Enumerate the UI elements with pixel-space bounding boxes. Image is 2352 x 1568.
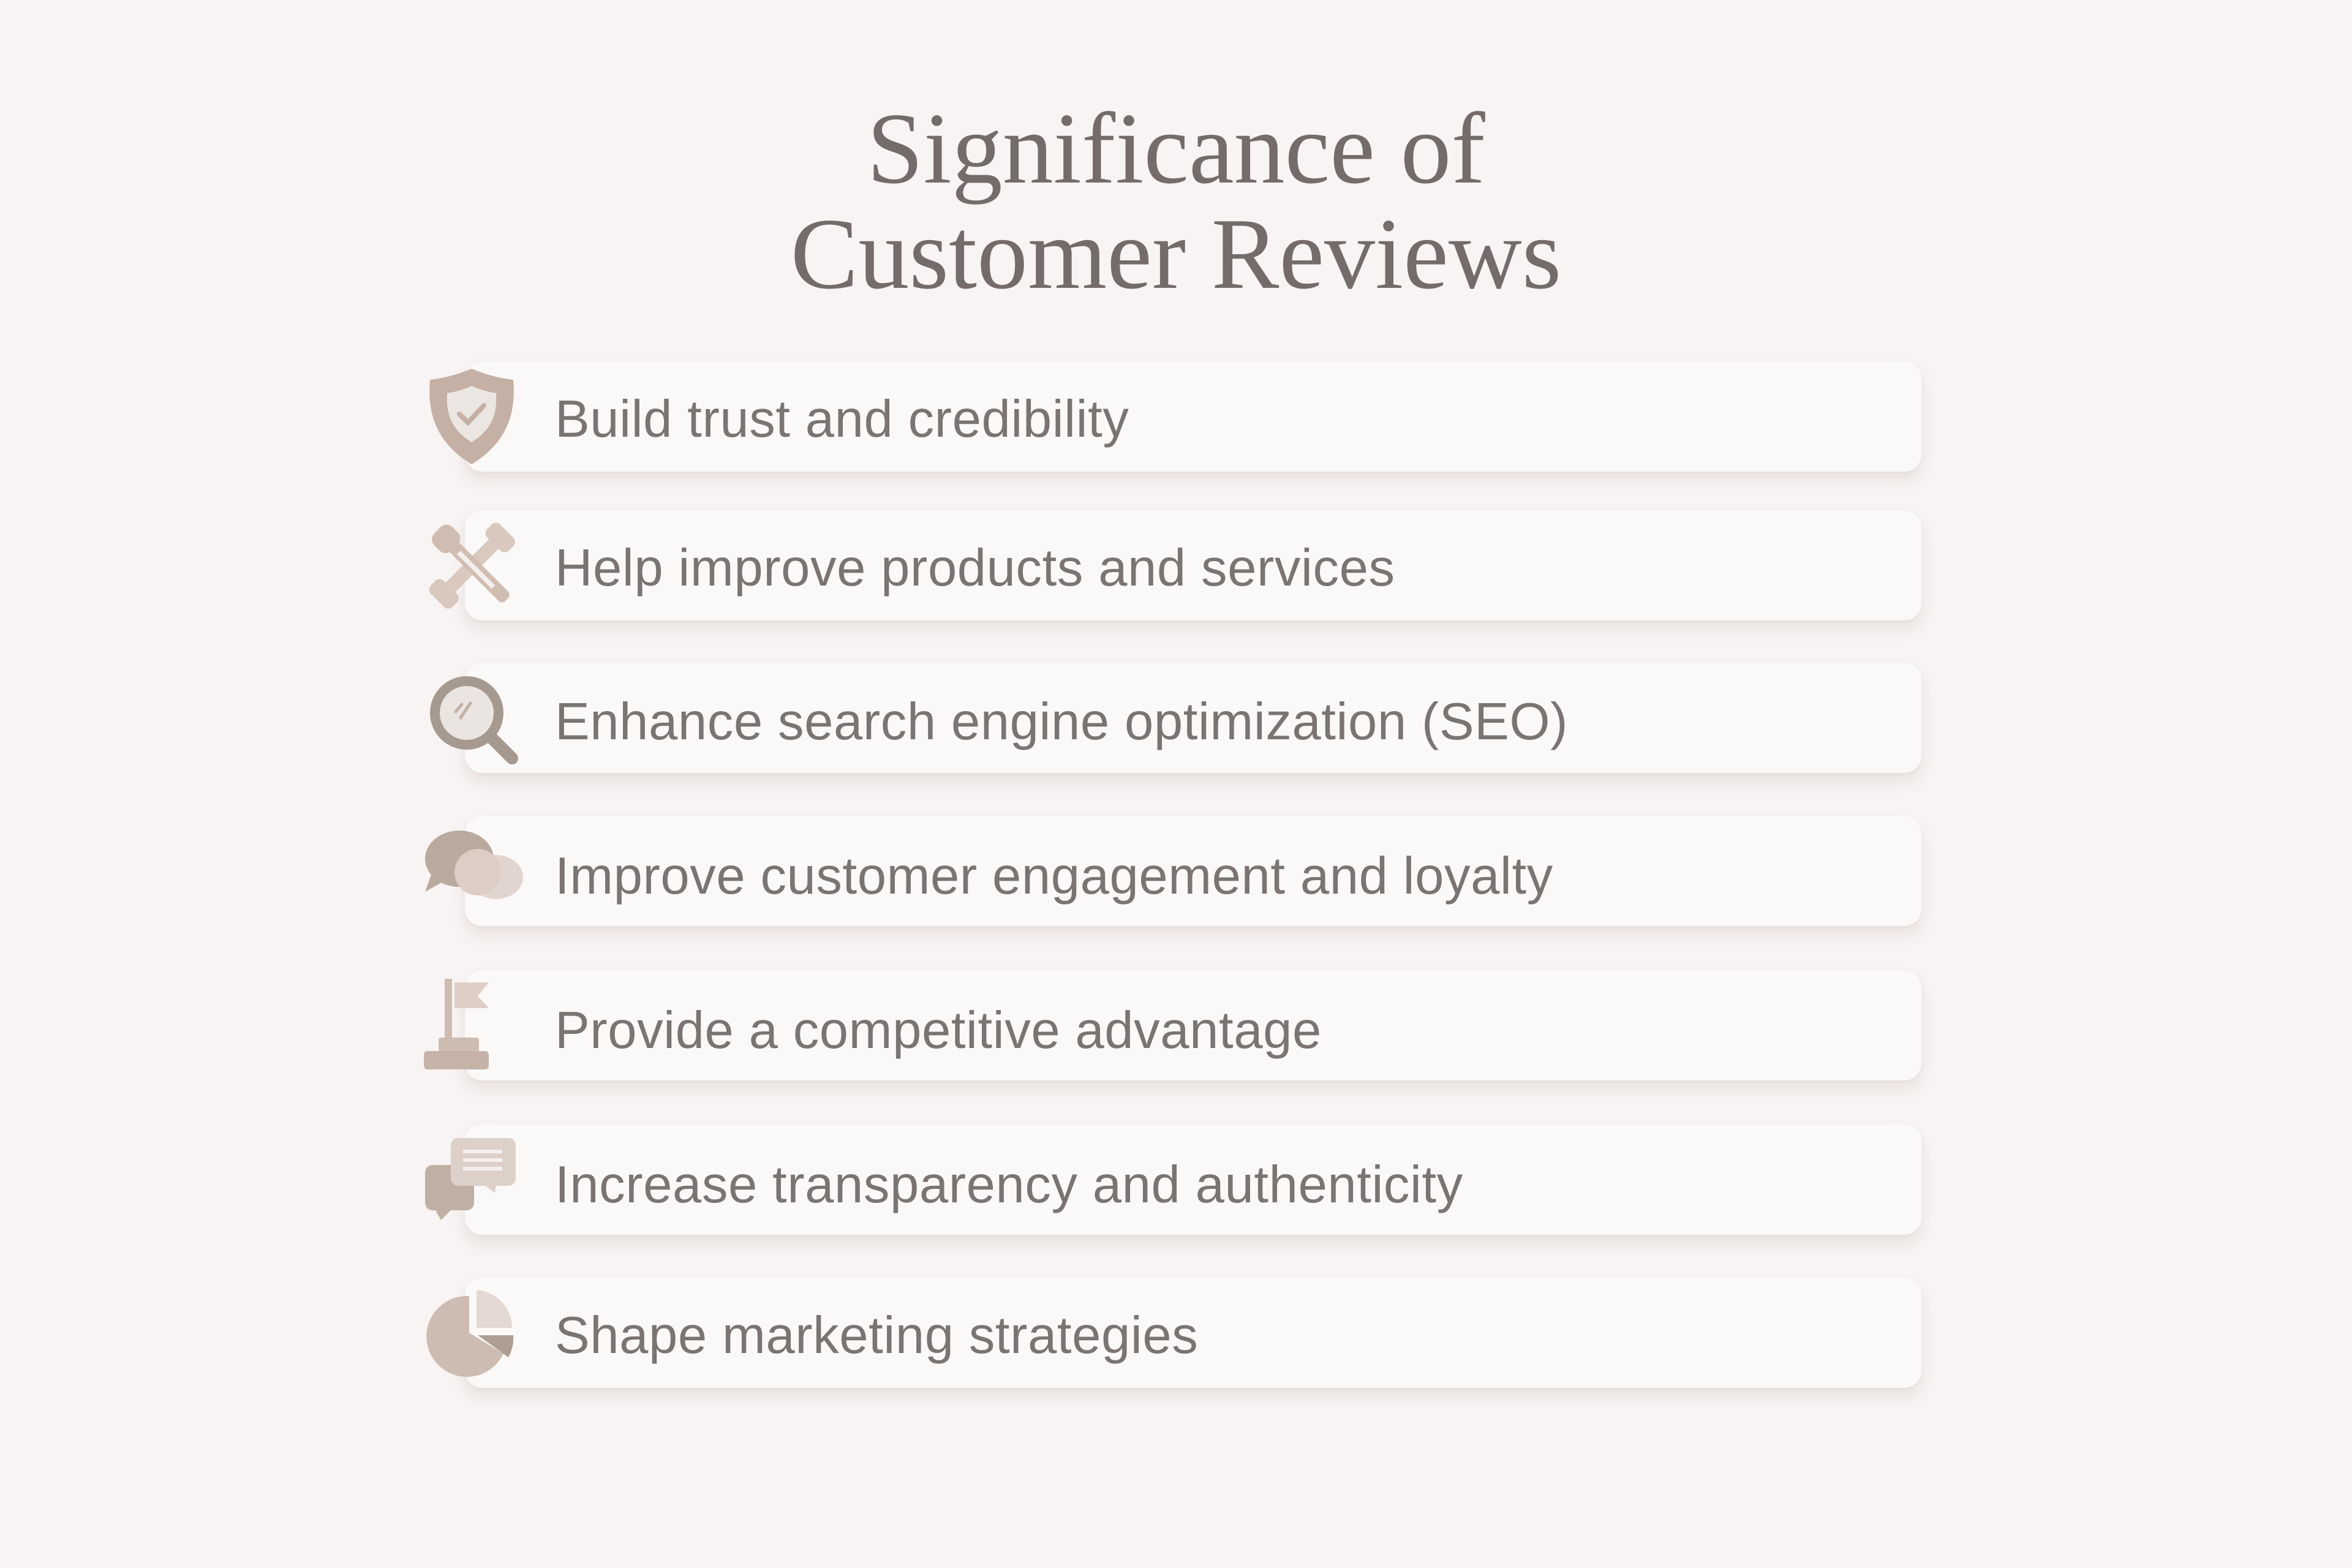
card: transparency [465,1125,1921,1235]
title: Customer Reviews [791,197,1561,310]
text: transparency: Increase transparency and authenticity [555,1156,1463,1214]
icon: pie chart [426,1290,513,1377]
title [791,92,1561,310]
card: build trust [465,361,1921,472]
text: SEO: Enhance search engine optimization (SEO) [555,693,1568,751]
text: competitive: Provide a competitive advantage [555,1001,1322,1060]
title: Significance of [867,92,1485,205]
icon: shield [429,369,514,464]
icon: message boxes [425,1138,516,1220]
icon: magnifier [430,676,518,764]
text: improve products: Help improve products and services [555,539,1395,597]
text: build trust: Build trust and credibility [555,390,1129,448]
card: engagement [465,816,1921,926]
text: marketing: Shape marketing strategies [555,1306,1198,1365]
card: marketing [465,1278,1921,1388]
text: engagement: Improve customer engagement and loyalty [555,847,1553,905]
icon: chat bubbles [425,831,523,899]
icon: flag podium [424,979,489,1069]
card: SEO [465,663,1921,773]
card: improve products [465,510,1921,620]
icon: tools [429,523,515,609]
card: competitive [465,970,1921,1080]
